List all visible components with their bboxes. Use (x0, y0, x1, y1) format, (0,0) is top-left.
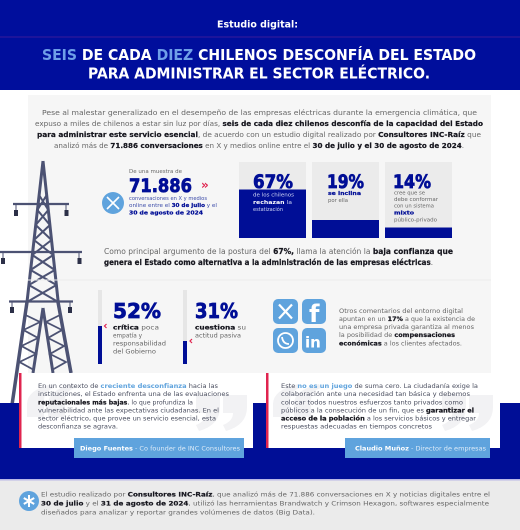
bar: 67%: rechazan la (253, 200, 292, 206)
other comments text: la posibilidad de compensaciones (339, 332, 455, 339)
stat: 52%: crítica poca (113, 324, 159, 332)
icon: X (273, 299, 298, 324)
quote card: Claudio Muñoz: colaboración ante una necesidad tan básica y debemos (281, 390, 470, 398)
quote card: Diego Fuentes: En un contexto de creciente desconfianza hacia las (38, 383, 218, 390)
sample size block (102, 169, 217, 216)
stat: 31%: actitud pasiva (195, 332, 241, 340)
title: PARA ADMINISTRAR EL SECTOR ELÉCTRICO. (88, 64, 430, 82)
stat: 31%: 31% (195, 299, 238, 323)
other comments text (339, 308, 475, 348)
stat: 52% (98, 290, 166, 364)
bar: 19% (312, 162, 379, 238)
quote card: Claudio Muñoz: Este no es un juego de suma cero. La ciudadanía exige la (281, 382, 478, 390)
bar: 67%: de los chilenos (253, 192, 295, 198)
bar: 67%: estatización (253, 206, 283, 213)
quote card: Diego Fuentes: sector eléctrico, que provee un servicio esencial, esta (38, 414, 216, 422)
intro text: para administrar este servicio esencial , de acuerdo con un estudio digital realizado por Consultores INC-Raíz que (37, 131, 481, 139)
title: SEIS DE CADA DIEZ CHILENOS DESCONFÍA DEL ESTADO (42, 45, 476, 64)
other comments text: apuntan en un 17% a que la existencia de (339, 316, 475, 323)
social media icons (273, 299, 326, 353)
quote card: Claudio Muñoz: públicos a la consecución de un fin, que es garantizar el (281, 406, 474, 414)
icon: Facebook: f (309, 300, 320, 328)
quote card: Diego Fuentes: instituciones, el Estado enfrenta una de las evaluaciones (38, 391, 229, 398)
header label: Estudio digital: (217, 20, 298, 30)
argument text (104, 247, 453, 267)
icon: X logo circle (102, 192, 124, 214)
intro text: Pese al malestar generalizado en el desempeño de las empresas eléctricas durante la emergencia climática, que (42, 109, 477, 117)
lower blue band (0, 403, 520, 479)
bar: 14%: debe conformar (394, 197, 438, 203)
sample size block: conversaciones en X y medios (129, 196, 207, 202)
title (42, 45, 476, 82)
other comments text: económicas a los clientes afectados. (339, 340, 462, 348)
header band (0, 0, 520, 90)
quote card: Diego Fuentes (19, 373, 253, 458)
sample size block: 30 de agosto de 2024 (129, 210, 204, 216)
bar: 14%: cree que se (394, 190, 425, 196)
argument text: Como principal argumento de la postura del 67%, llama la atención la baja confianza que (104, 247, 453, 256)
bar: 67%: 67% (253, 171, 293, 193)
stat: 52%: del Gobierno (113, 348, 156, 356)
sample number: 71.886 (129, 175, 192, 197)
main panel background (28, 95, 491, 373)
bar: 14%: público-privado (394, 216, 437, 224)
stat: 52%: 52% (113, 299, 161, 323)
bar: 19%: por ella (328, 198, 348, 204)
stat: 31%: cuestiona su (195, 324, 246, 332)
bar: 19%: 19% (327, 171, 364, 193)
quote card: Diego Fuentes: vulnerabilidad ante las expectativas ciudadanas. En el (38, 408, 219, 414)
footer note: diseñados para analizar y reportar grandes volúmenes de datos (Big Data). (41, 508, 315, 516)
footer band (0, 480, 520, 530)
footer note: 30 de julio y el 31 de agosto de 2024 , utilizó las herramientas Brandwatch y Crimson Hexagon, softwares especialmente (41, 500, 489, 508)
bar: 14%: mixto (394, 210, 414, 216)
footer note (41, 490, 490, 516)
stat: 31% (183, 290, 246, 364)
stat: 52%: responsabilidad (113, 340, 166, 348)
sample size block: online entre el 30 de julio y el (129, 203, 217, 209)
quote card: Claudio Muñoz: colocar todos nuestros esfuerzos tanto privados como (281, 400, 463, 406)
name tag (345, 438, 490, 458)
name tag: Claudio Muñoz - Director de empresas (355, 444, 487, 452)
icon: WhatsApp (273, 328, 298, 353)
name tag (74, 438, 244, 458)
name tag: Diego Fuentes - Co founder de INC Consultores (80, 444, 241, 452)
bar: 14%: con un sistema (394, 204, 434, 210)
icon: transmission tower (0, 161, 82, 405)
other comments text: Otros comentarios del entorno digital (339, 308, 463, 315)
intro text: expuso a miles de chilenos a estar sin luz por días, seis de cada diez chilenos desconfía de la capacidad del Estado (35, 120, 483, 128)
icon: LinkedIn: in (305, 334, 321, 352)
quote card: Claudio Muñoz: acceso de la población a los servicios básicos y entregar (281, 414, 476, 422)
quote card: Diego Fuentes: desconfianza se agrava. (38, 424, 118, 430)
bar: 14% (385, 162, 452, 238)
intro text (35, 109, 483, 150)
quote card: Claudio Muñoz: respuestas adecuadas en tiempos concretos (281, 424, 432, 430)
quote card: Claudio Muñoz (266, 373, 500, 458)
intro text: analizó más de 71.886 conversaciones en X y medios online entre el 30 de julio y el 30 de agosto de 2024 . (54, 142, 464, 150)
other comments text: una empresa privada garantiza al menos (339, 324, 474, 331)
footer note: El estudio realizado por Consultores INC-Raíz , que analizó más de 71.886 conversaciones en X y noticias digitales entre el (41, 490, 490, 498)
sample size block: De una muestra de (129, 169, 182, 175)
quote card: Diego Fuentes: reputacionales más bajas, lo que profundiza la (38, 398, 193, 406)
argument text: genera el Estado como alternativa a la administración de las empresas eléctricas. (104, 258, 433, 267)
icon: asterisk circle (19, 491, 39, 511)
icon: red chevrons: » (201, 178, 209, 192)
bar: 19%: se inclina (328, 191, 361, 197)
stat: 52%: empatía y (113, 332, 142, 340)
bar: 14%: 14% (393, 171, 431, 193)
bar: 67% (239, 162, 306, 238)
